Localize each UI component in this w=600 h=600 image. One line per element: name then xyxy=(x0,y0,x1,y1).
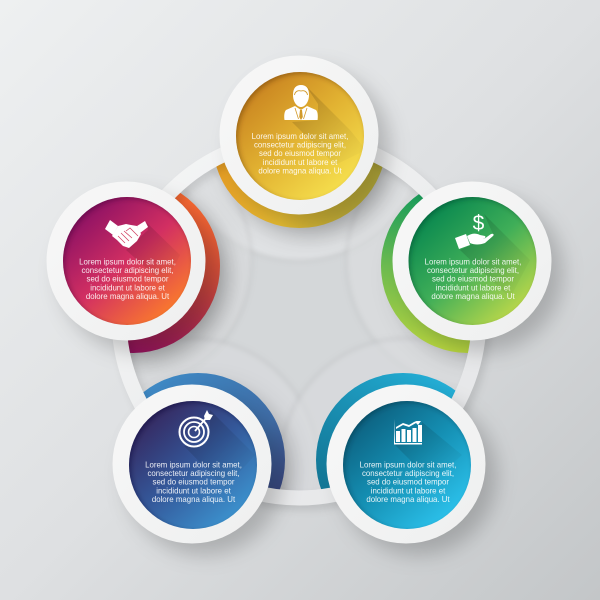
crescent: top xyxy=(216,162,399,246)
text block: dolore magna aliqua. Ut xyxy=(366,495,450,504)
text block: consectetur adipiscing elit, xyxy=(427,266,519,275)
text block: Lorem ipsum dolor sit amet, xyxy=(145,460,242,469)
text block: dolore magna aliqua. Ut xyxy=(152,495,236,504)
big ring xyxy=(119,138,483,503)
text block: sed do eiusmod tempor xyxy=(367,478,449,487)
step 5: bottom right circle xyxy=(326,384,497,555)
inner faint circles xyxy=(130,168,380,428)
icon: target xyxy=(180,410,213,446)
text block: sed do eiusmod tempor xyxy=(259,149,341,158)
text block: sed do eiusmod tempor xyxy=(87,275,169,284)
text block: incididunt ut labore et xyxy=(371,486,446,495)
long shadow xyxy=(460,214,528,289)
long shadow xyxy=(126,222,180,285)
text block: incididunt ut labore et xyxy=(263,158,338,167)
text block xyxy=(360,460,456,504)
icon: businessman xyxy=(284,85,318,120)
step 4: bottom left circle xyxy=(112,384,283,555)
text block: consectetur adipiscing elit, xyxy=(254,140,346,150)
text block: sed do eiusmod tempor xyxy=(153,478,235,487)
text block xyxy=(145,460,242,504)
text block: Lorem ipsum dolor sit amet, xyxy=(360,460,456,469)
text block: dolore magna aliqua. Ut xyxy=(431,292,515,301)
text block: consectetur adipiscing elit, xyxy=(362,469,454,478)
step 3: left circle xyxy=(46,182,217,352)
text block: Lorem ipsum dolor sit amet, xyxy=(79,257,176,266)
text block: dolore magna aliqua. Ut xyxy=(258,167,342,176)
icon: handshake xyxy=(105,220,148,248)
text block: consectetur adipiscing elit, xyxy=(148,469,240,478)
crescent: bottom left xyxy=(143,373,302,490)
long shadow xyxy=(394,422,462,482)
text block xyxy=(79,257,176,301)
text block xyxy=(425,257,521,301)
step 1: top circle xyxy=(220,56,390,226)
text block: consectetur adipiscing elit, xyxy=(82,266,174,275)
text block: incididunt ut labore et xyxy=(90,283,166,292)
colored crescents xyxy=(128,162,470,490)
icon: bar chart xyxy=(394,419,422,444)
crescent: bottom right xyxy=(316,373,456,490)
text block: sed do eiusmod tempor xyxy=(432,275,514,284)
icon: hand with dollar: $ xyxy=(473,212,485,235)
text block: incididunt ut labore et xyxy=(436,283,511,292)
long shadow xyxy=(184,410,249,482)
long shadow xyxy=(292,86,358,164)
text block: incididunt ut labore et xyxy=(156,486,232,495)
icon: hand with dollar xyxy=(455,212,494,249)
text block: Lorem ipsum dolor sit amet, xyxy=(252,132,348,141)
step 2: right circle xyxy=(392,182,563,352)
text block: Lorem ipsum dolor sit amet, xyxy=(425,257,521,266)
crescent: right xyxy=(381,194,470,368)
crescent: left xyxy=(128,192,238,372)
text block: dolore magna aliqua. Ut xyxy=(86,292,170,301)
text block xyxy=(252,132,348,176)
